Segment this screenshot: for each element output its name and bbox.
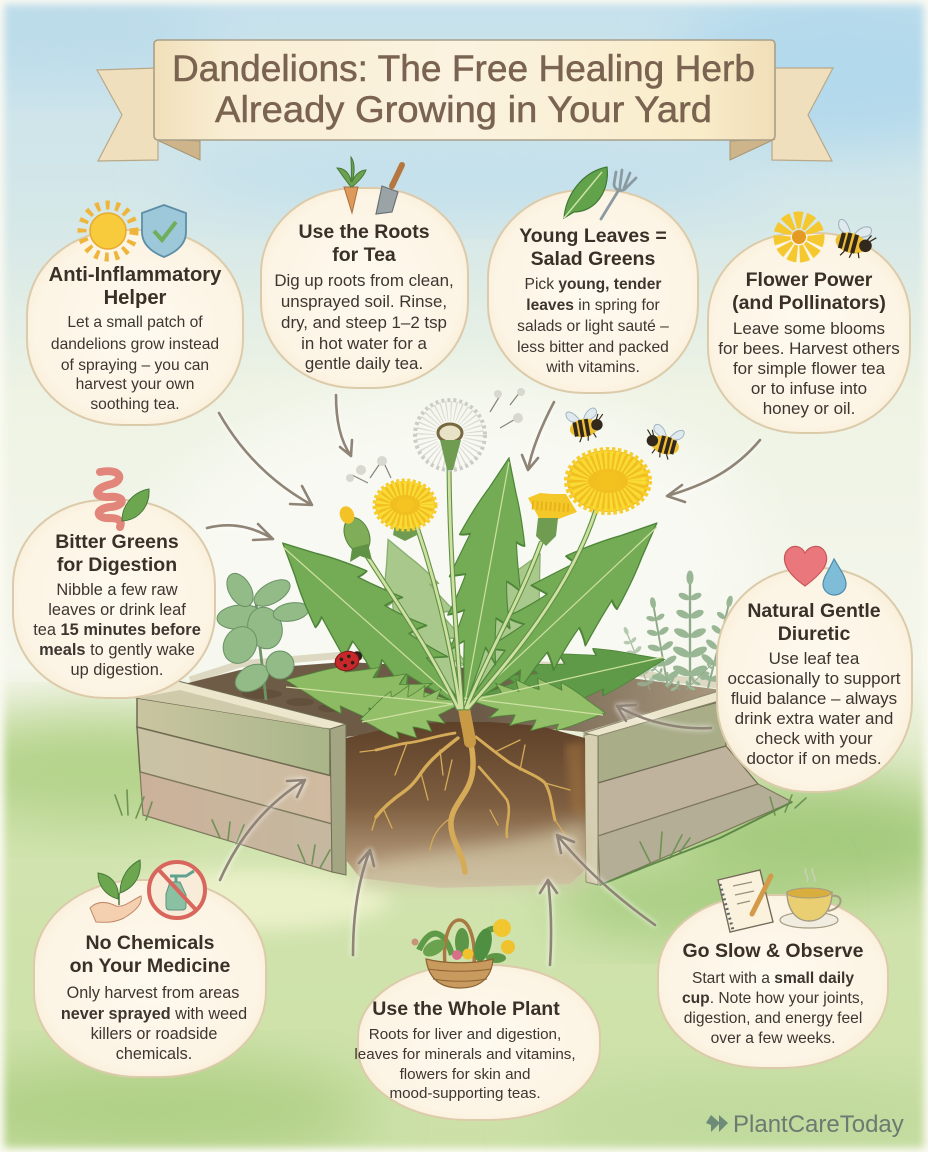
banner body — [154, 40, 775, 140]
icon: bee — [831, 219, 879, 263]
panel: natural gentle diuretic — [717, 546, 912, 792]
heading: Go Slow & Observe — [683, 940, 864, 962]
icon: shield — [142, 205, 186, 257]
icon: carrot root — [337, 157, 366, 213]
body text: cup — [682, 990, 710, 1007]
left ribbon fold — [155, 139, 200, 160]
heading: Flower Power — [746, 269, 873, 291]
body text: tea — [33, 621, 61, 639]
heading: Natural Gentle — [747, 600, 881, 622]
icon: tea cup — [780, 868, 841, 928]
icon: leaf — [564, 167, 607, 218]
arrow: anti-inflammatory to plant — [219, 413, 312, 505]
seed head — [415, 400, 485, 470]
soil shading: orange band at right — [565, 742, 584, 820]
arrow: whole plant to soil right — [540, 880, 557, 965]
body text: Only harvest from areas — [67, 984, 239, 1002]
grass tufts — [115, 790, 806, 868]
body text: digestion, and energy feel — [684, 1010, 862, 1027]
heading: Bitter Greens — [55, 531, 179, 553]
body text: Dig up roots from clean, — [274, 271, 454, 290]
body text: small daily — [774, 970, 854, 987]
body text: fluid balance – always — [731, 689, 897, 708]
body text: Nibble a few raw — [56, 581, 178, 599]
body text: unsprayed soil. Rinse, — [281, 292, 447, 311]
icon: leaf — [122, 489, 149, 521]
arrow: diuretic to bed — [617, 705, 711, 728]
back herbs: mint on left — [216, 569, 310, 700]
arrow: young leaves to leaf — [522, 402, 554, 470]
body text: meals — [39, 641, 86, 659]
body text: mood-supporting teas. — [389, 1085, 541, 1102]
body text: dry, and steep 1–2 tsp — [281, 313, 447, 332]
soil crumble fade at base — [356, 820, 586, 886]
body text: with weed — [171, 1005, 247, 1023]
body text: flowers for skin and — [400, 1066, 530, 1083]
body text: to gently wake — [86, 641, 195, 659]
body text: doctor if on meds. — [746, 749, 882, 768]
panel: go slow and observe — [658, 868, 888, 1068]
body text: honey or oil. — [763, 399, 855, 418]
heading: (and Pollinators) — [732, 292, 886, 314]
body text: young, tender — [558, 276, 661, 293]
body text: Pick — [525, 276, 558, 293]
pale back rail — [190, 655, 725, 686]
panel: flower power and pollinators — [708, 219, 910, 433]
body text: up digestion. — [71, 661, 163, 679]
big flower right — [567, 450, 649, 512]
heading: on Your Medicine — [70, 955, 231, 977]
icon: heart — [784, 546, 827, 586]
body text: for simple flower tea — [733, 359, 886, 378]
heading: Use the Whole Plant — [372, 998, 560, 1020]
body text: of spraying – you can — [61, 357, 209, 374]
right bed wall — [584, 690, 792, 885]
body text: occasionally to support — [728, 669, 901, 688]
icon: water drop — [823, 559, 846, 595]
leaf midribs — [283, 462, 664, 722]
left ribbon tail — [97, 68, 158, 161]
body text: chemicals. — [116, 1045, 192, 1063]
half-open flower — [528, 493, 577, 546]
body text: 15 minutes before — [61, 621, 201, 639]
arrow: no chemicals to bed — [220, 780, 305, 880]
icon: harvest basket — [412, 919, 515, 988]
body text: or to infuse into — [751, 379, 867, 398]
body text: Roots for liver and digestion, — [369, 1026, 561, 1043]
dandelion plant — [254, 388, 685, 747]
panel: anti-inflammatory helper — [27, 205, 243, 425]
heading: for Tea — [332, 244, 396, 266]
pale back leaves — [358, 527, 565, 720]
title line 1: Dandelions: The Free Healing Herb — [172, 47, 755, 89]
panel: use the whole plant — [354, 919, 600, 1120]
body text: . Note how your joints, — [710, 990, 864, 1007]
icon: trowel — [376, 165, 402, 214]
left bed wall — [137, 681, 346, 875]
body text: Start with a — [692, 970, 774, 987]
arrow: flower power to bloom — [667, 440, 760, 502]
body text: harvest your own — [76, 376, 194, 393]
open flower left — [375, 481, 435, 541]
back herbs: sage sprigs on right — [614, 571, 746, 695]
icon: no spray — [149, 862, 205, 918]
icon: sun — [82, 205, 134, 257]
ladybug — [333, 648, 365, 673]
body text: leaves — [526, 297, 574, 314]
icon: notebook and pen — [718, 870, 773, 932]
right ribbon fold — [730, 139, 775, 160]
heading: for Digestion — [57, 554, 177, 576]
heading: No Chemicals — [86, 932, 215, 954]
soil cross-section — [346, 722, 585, 888]
soil blotches — [242, 685, 578, 712]
bee near plant — [566, 406, 607, 444]
icon: fork — [601, 170, 636, 219]
icon: hand with seedling — [90, 860, 141, 922]
body text: check with your — [755, 729, 873, 748]
panel: use the roots for tea — [261, 157, 468, 388]
logo: PlantCareToday: PlantCareToday — [733, 1111, 904, 1138]
panel: young leaves salad greens — [488, 167, 698, 393]
body text: never sprayed — [61, 1005, 171, 1023]
floating seeds — [346, 388, 525, 483]
panel: no chemicals on your medicine — [34, 860, 266, 1077]
body text: with vitamins. — [545, 359, 640, 376]
body text: leaves for minerals and vitamins, — [354, 1046, 576, 1063]
title banner — [97, 40, 833, 161]
heading: Anti-Inflammatory — [49, 264, 222, 286]
body text: dandelions grow instead — [51, 336, 219, 353]
body text: in hot water for a — [301, 334, 428, 353]
heading: Helper — [104, 287, 167, 309]
panel: bitter greens for digestion — [13, 471, 215, 698]
arrows — [207, 395, 760, 965]
heading: Salad Greens — [531, 248, 655, 270]
body text: drink extra water and — [735, 709, 893, 728]
body text: salads or light sauté – — [517, 318, 669, 335]
body text: for bees. Harvest others — [718, 339, 900, 358]
arrow: go slow to soil — [557, 835, 655, 925]
body text: Use leaf tea — [769, 649, 860, 668]
heading: Diuretic — [778, 623, 850, 645]
body text: Leave some blooms — [733, 319, 885, 338]
arrow: bitter greens to plant — [207, 524, 273, 540]
body text: leaves or drink leaf — [48, 601, 186, 619]
body text: over a few weeks. — [711, 1030, 835, 1047]
arrow: whole plant to soil left — [353, 850, 374, 955]
right ribbon tail — [772, 68, 833, 161]
heading: Use the Roots — [298, 221, 430, 243]
icon: intestine — [97, 471, 122, 527]
body text: less bitter and packed — [517, 339, 669, 356]
second bee near plant — [641, 422, 685, 462]
flower stems — [365, 455, 596, 708]
body text: soothing tea. — [90, 396, 180, 413]
arrow: roots tea to seeds — [336, 395, 352, 456]
body text: gentle daily tea. — [305, 354, 423, 373]
dandelion roots — [360, 708, 570, 872]
title line 2: Already Growing in Your Yard — [215, 88, 712, 130]
raised garden bed — [115, 569, 806, 888]
body text: in spring for — [574, 297, 660, 314]
soil top surface — [180, 662, 722, 737]
heading: Young Leaves = — [519, 225, 667, 247]
body text: Let a small patch of — [67, 314, 203, 331]
wall base shadow line — [600, 802, 792, 885]
serrated leaves — [254, 451, 684, 747]
icon: yellow flower — [782, 220, 816, 254]
body text: killers or roadside — [91, 1025, 217, 1043]
bud — [337, 504, 375, 562]
